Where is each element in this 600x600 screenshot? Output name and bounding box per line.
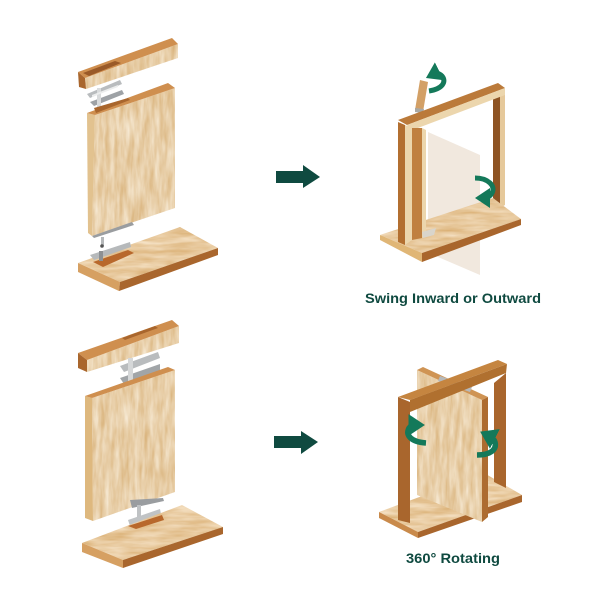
- right frame post: [494, 373, 506, 488]
- hinge hardware, bottom: [128, 498, 164, 527]
- floor board: [82, 505, 223, 568]
- rotation arrow: right: [477, 436, 495, 455]
- caption: rotating: 360° Rotating: [406, 550, 500, 566]
- panel: exploded door assembly, bottom: [78, 320, 223, 568]
- panel: exploded door assembly, top: [78, 38, 218, 291]
- hinge: [415, 108, 424, 113]
- hinge bottom: [422, 228, 436, 238]
- hinge hardware, top: [87, 80, 124, 110]
- left frame post: [398, 122, 426, 245]
- door slab: [417, 367, 488, 522]
- floor board: [78, 227, 218, 291]
- caption: swing: Swing Inward or Outward: [365, 291, 541, 306]
- door slab: [87, 83, 175, 236]
- hinge hardware, top: [120, 352, 160, 390]
- left frame post: [398, 397, 410, 523]
- rotation arrow: left: [408, 425, 426, 443]
- floor board: [379, 473, 522, 538]
- hinge: [438, 376, 472, 392]
- rotation arrow: top: [429, 73, 444, 91]
- top frame beam: [398, 360, 507, 412]
- top frame beam: [398, 83, 505, 131]
- arrow: bottom row: [274, 431, 318, 454]
- arrow: top row: [276, 165, 320, 188]
- panel: assembled door swinging: [380, 73, 521, 275]
- ghost open door: [428, 132, 480, 275]
- top beam: [78, 320, 179, 372]
- floor board: [380, 198, 521, 262]
- panel: assembled door rotating: [379, 360, 522, 538]
- top beam: [78, 38, 178, 89]
- back door edge: [415, 80, 428, 112]
- right frame post: [493, 88, 505, 208]
- rotation arrow: bottom: [475, 178, 493, 198]
- door slab: [85, 367, 175, 521]
- hinge hardware, bottom: [92, 222, 134, 248]
